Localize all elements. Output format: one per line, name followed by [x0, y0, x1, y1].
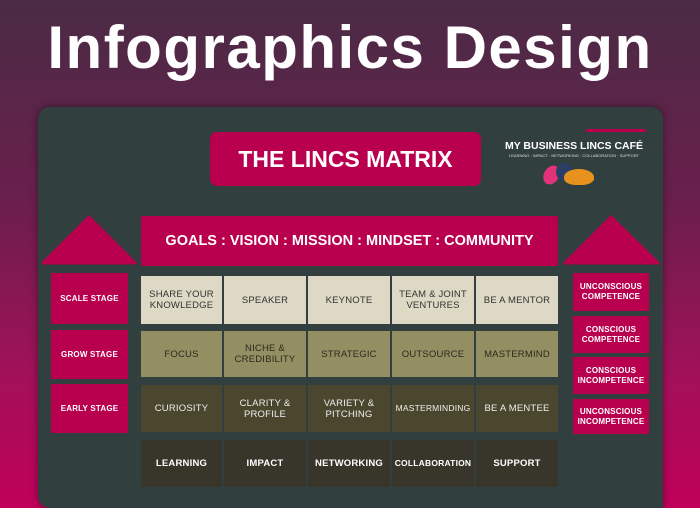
stage labels: EARLY STAGE — [61, 404, 118, 413]
grid: matrix cells: SUPPORT — [493, 458, 541, 469]
grid: matrix cells: KEYNOTE — [326, 294, 372, 306]
grid: matrix cells: IMPACT — [247, 458, 283, 469]
grid: matrix cells: FOCUS — [164, 348, 199, 360]
competence labels: CONSCIOUS — [586, 366, 636, 374]
grid: matrix cells: CLARITY & — [240, 398, 290, 408]
grid: matrix cells: SHARE YOUR — [149, 289, 214, 300]
competence labels: COMPETENCE — [582, 292, 640, 301]
grid: matrix cells: SPEAKER — [242, 294, 288, 306]
grid: matrix cells: CREDIBILITY — [235, 354, 295, 365]
logo: my business lincs cafe: LEARNING · IMPACT · NETWORKING · COLLABORATION · SUPPORT — [509, 153, 639, 158]
stage labels — [51, 273, 128, 433]
grid: matrix cells: CURIOSITY — [155, 403, 208, 414]
competence labels: UNCONSCIOUS — [580, 282, 642, 291]
grid: matrix cells: LEARNING — [156, 458, 207, 469]
icon: hats — [543, 163, 594, 185]
grid: matrix cells: KNOWLEDGE — [150, 300, 213, 311]
title: Infographics Design — [47, 14, 653, 81]
arrow: left up triangle — [42, 215, 136, 264]
competence labels: INCOMPETENCE — [578, 416, 644, 426]
grid: matrix cells: OUTSOURCE — [402, 348, 464, 360]
competence labels: UNCONSCIOUS — [580, 406, 642, 416]
arrow: right up triangle — [564, 215, 660, 264]
grid: matrix cells: PROFILE — [244, 408, 286, 420]
grid: matrix cells: VENTURES — [406, 300, 460, 311]
grid: matrix cells — [141, 276, 558, 487]
stage labels: SCALE STAGE — [60, 294, 119, 303]
grid: matrix cells: NETWORKING — [315, 458, 383, 469]
competence labels — [573, 273, 649, 434]
grid: matrix cells: TEAM & JOINT — [399, 289, 467, 300]
banner: goals — [141, 216, 558, 266]
grid: matrix cells: NICHE & — [245, 343, 285, 354]
grid: matrix cells: PITCHING — [326, 408, 372, 420]
grid: matrix cells: STRATEGIC — [321, 348, 377, 360]
logo: my business lincs cafe — [505, 129, 646, 185]
grid: matrix cells: MASTERMINDING — [396, 403, 470, 413]
grid: matrix cells: MASTERMIND — [484, 348, 550, 360]
grid: matrix cells: VARIETY & — [324, 398, 374, 408]
competence labels: INCOMPETENCE — [578, 376, 644, 384]
banner: goals: GOALS : VISION : MISSION : MINDSET : COMMUNITY — [165, 233, 534, 249]
competence labels: COMPETENCE — [582, 334, 640, 344]
grid: matrix cells: BE A MENTEE — [484, 403, 550, 414]
logo: my business lincs cafe: MY BUSINESS LINCS CAFÉ — [505, 140, 643, 152]
competence labels: CONSCIOUS — [586, 324, 636, 334]
grid: matrix cells: COLLABORATION — [395, 458, 471, 468]
panel: matrix — [38, 107, 663, 508]
heading: the lincs matrix — [210, 132, 481, 186]
grid: matrix cells: BE A MENTOR — [484, 294, 550, 306]
stage labels: GROW STAGE — [61, 350, 118, 359]
heading: the lincs matrix: THE LINCS MATRIX — [238, 146, 453, 172]
